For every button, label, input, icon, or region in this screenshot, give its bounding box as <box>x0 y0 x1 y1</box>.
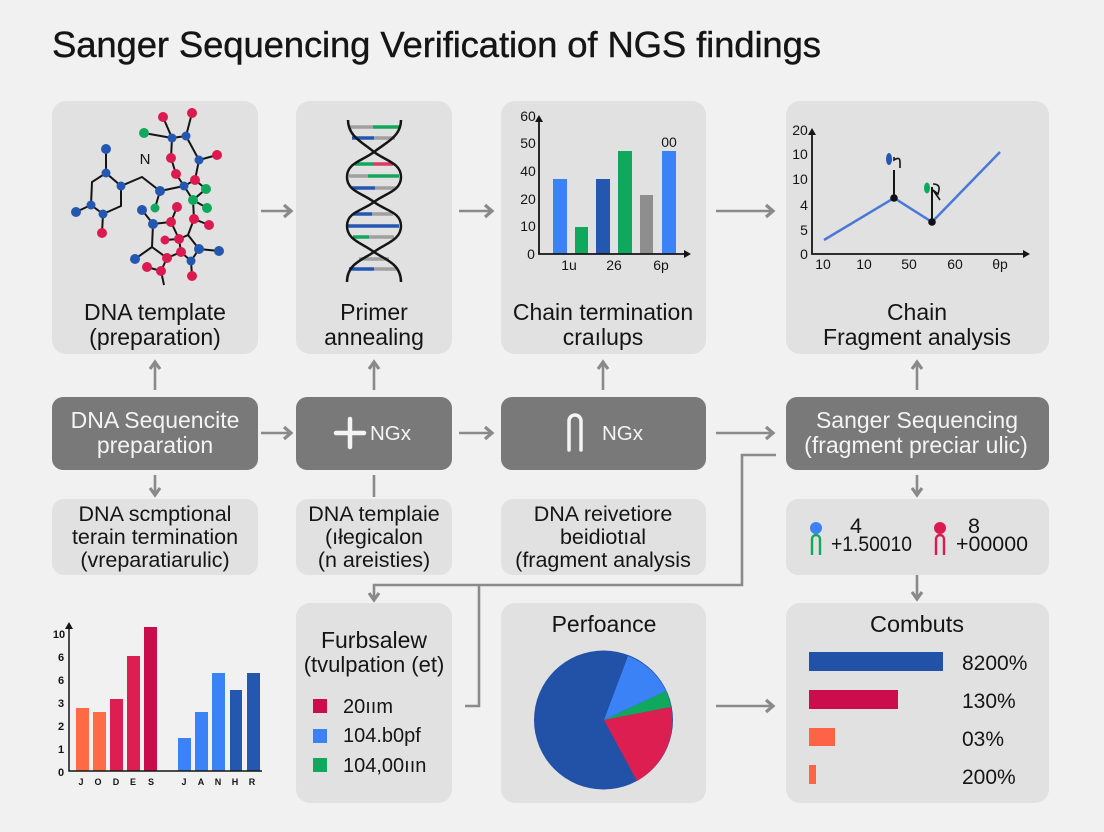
icon: blue green marker <box>810 522 822 555</box>
grouped bar chart: 2 <box>58 721 64 733</box>
panel: DNA template preparation <box>52 101 258 354</box>
line chart: 4 <box>800 197 808 213</box>
legend item red <box>313 696 393 718</box>
note: DNA template <box>296 499 452 575</box>
line chart: 10 <box>856 256 872 272</box>
legend item blue: 104.b0pf <box>343 725 421 747</box>
arrows: top row <box>261 205 773 217</box>
grouped bar chart: D <box>113 777 120 787</box>
horizontal bar 2 <box>809 690 1016 713</box>
label: Fragment analysis <box>823 324 1011 350</box>
grouped bar chart: S <box>148 777 154 787</box>
grouped bar chart: 6 <box>58 652 64 664</box>
label: Chain <box>887 299 947 325</box>
bar chart: 20 <box>520 191 536 207</box>
horizontal bar 3: 03% <box>962 728 1004 751</box>
line chart: 10 <box>815 256 831 272</box>
grouped bar chart: J <box>78 777 84 787</box>
value two: +00000 <box>956 532 1028 556</box>
value one: +1.50010 <box>831 532 912 556</box>
step: Sanger Sequencing: (fragment preciar ulic) <box>804 432 1028 458</box>
line chart <box>792 122 1030 272</box>
legend item green: 104,00ıın <box>343 755 426 777</box>
label: DNA template <box>84 299 226 325</box>
bar chart <box>520 108 691 273</box>
legend item red: 20ıım <box>343 696 393 718</box>
heading: (tvulpation (et) <box>304 652 444 677</box>
grouped bar chart: J <box>181 777 187 787</box>
note: DNA reivetiore: beidiotıal <box>560 525 646 549</box>
line chart: 50 <box>901 256 917 272</box>
horizontal bar 2: 130% <box>962 690 1016 713</box>
label: annealing <box>324 324 424 350</box>
horizontal bar 3 <box>809 728 1004 751</box>
icon: molecule <box>71 108 224 285</box>
heading: Combuts <box>870 611 964 637</box>
label: Chain termination <box>513 299 693 325</box>
bar chart: 50 <box>520 135 536 151</box>
note: DNA scmptional: DNA scmptional <box>79 502 231 526</box>
heading: Furbsalew <box>321 627 427 653</box>
grouped bar chart: 6 <box>58 675 64 687</box>
line chart: 5 <box>800 222 808 238</box>
line chart: 10 <box>792 171 808 187</box>
line chart: 60 <box>947 256 963 272</box>
step: Sanger Sequencing: Sanger Sequencing <box>816 407 1018 433</box>
horizontal bar 4 <box>809 765 1016 789</box>
step: Sanger Sequencing <box>786 397 1049 470</box>
step: DNA Sequencite preparation: DNA Sequencite <box>71 407 239 433</box>
step: plus NGx <box>296 397 452 470</box>
bar chart: 40 <box>520 163 536 179</box>
line chart: 20 <box>792 122 808 138</box>
panel: results <box>786 603 1049 803</box>
horizontal bar 1 <box>809 652 1027 675</box>
grouped bar chart: 10 <box>53 629 65 641</box>
grouped bar chart: N <box>215 777 221 787</box>
icon: red marker <box>934 522 946 555</box>
grouped bar chart: E <box>130 777 136 787</box>
bar chart: 10 <box>520 218 536 234</box>
grouped bar chart: 1 <box>58 744 64 756</box>
note: DNA reivetiore: DNA reivetiore <box>534 502 672 526</box>
icon: DNA double helix <box>347 120 401 282</box>
bar chart: 26 <box>606 257 622 273</box>
label: (preparation) <box>89 324 221 350</box>
horizontal bar 4: 200% <box>962 766 1016 789</box>
grouped bar chart: 3 <box>58 698 64 710</box>
note: DNA template: (ıłegicalon <box>325 525 423 549</box>
arrows: downward <box>150 475 922 599</box>
note: DNA scmptional: terain termination <box>72 525 238 549</box>
grouped bar chart: O <box>94 777 102 787</box>
panel: performance <box>501 603 706 803</box>
arrows: upward <box>150 362 922 390</box>
grouped bar chart: A <box>198 777 205 787</box>
title: Sanger Sequencing Verification of NGS findings <box>52 24 821 65</box>
arrow: pie to results <box>716 700 773 712</box>
heading: Perfoance <box>552 611 656 637</box>
step: DNA Sequencite preparation <box>52 397 258 470</box>
grouped bar chart: 0 <box>58 767 64 779</box>
step: plus NGx: NGx <box>370 422 412 445</box>
note: DNA template: (n areisties) <box>318 548 430 572</box>
line chart: θp <box>992 256 1008 272</box>
panel: legend <box>296 603 452 803</box>
connector: legend to junction <box>465 585 479 706</box>
step: hairpin NGx <box>501 397 706 470</box>
grouped bar chart <box>53 622 262 787</box>
step: hairpin NGx: NGx <box>602 422 644 445</box>
label: craılups <box>563 324 643 350</box>
panel: primer annealing <box>296 101 452 354</box>
step: DNA Sequencite preparation: preparation <box>97 432 213 458</box>
pie chart <box>534 650 673 790</box>
grouped bar chart: H <box>232 777 238 787</box>
bar chart: 6p <box>653 257 669 273</box>
grouped bar chart: R <box>249 777 256 787</box>
panel: chain termination <box>501 101 706 354</box>
bar chart: 0 <box>527 246 535 262</box>
icon: molecule: N <box>140 151 150 168</box>
value two: 8 <box>968 514 980 538</box>
value one: 4 <box>850 514 862 538</box>
panel: values <box>786 499 1049 575</box>
bar chart: 00 <box>661 134 677 150</box>
note: DNA scmptional <box>52 499 258 575</box>
bar chart: 60 <box>520 108 536 124</box>
line chart: 10 <box>792 146 808 162</box>
note: DNA reivetiore <box>501 499 706 575</box>
note: DNA scmptional: (vreparatiarulic) <box>80 548 230 572</box>
note: DNA template: DNA templaie <box>308 502 440 526</box>
bar chart: 1u <box>561 257 577 273</box>
arrows: middle row <box>261 427 773 439</box>
label: Primer <box>340 299 408 325</box>
connector: Sanger to legend <box>369 455 776 600</box>
note: DNA reivetiore: (fragment analysis <box>515 548 691 572</box>
line chart: 0 <box>800 246 808 262</box>
panel: fragment analysis <box>786 101 1049 354</box>
horizontal bar 1: 8200% <box>962 652 1027 675</box>
